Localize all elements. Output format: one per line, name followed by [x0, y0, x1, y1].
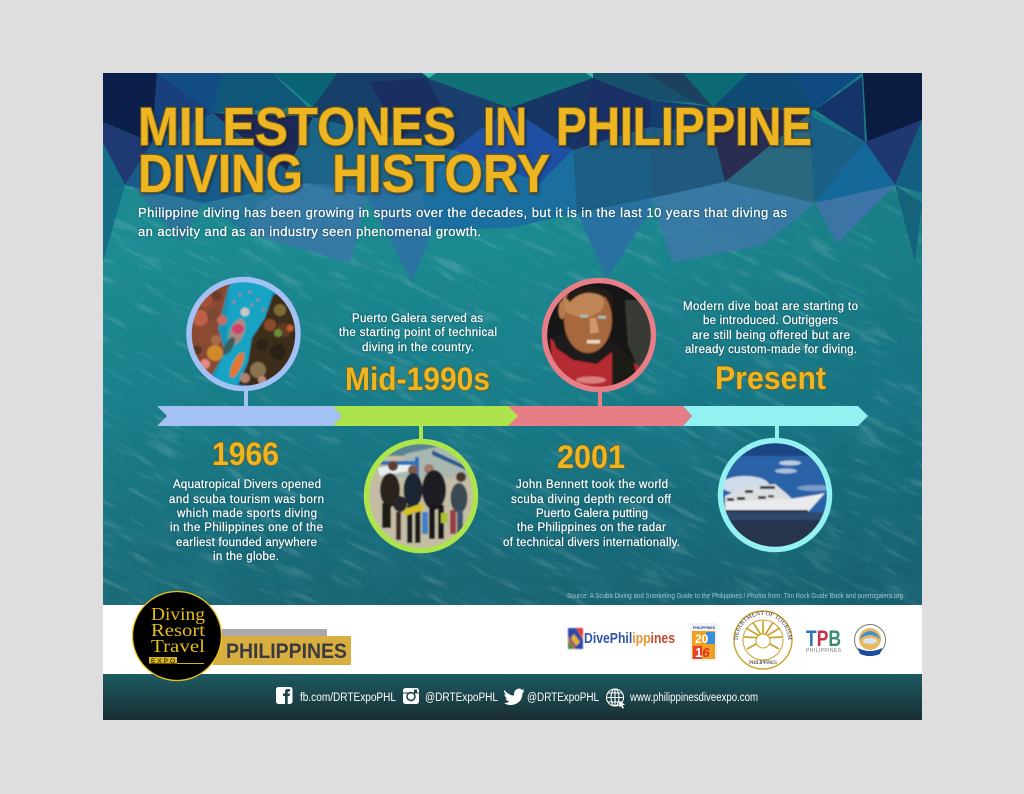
- logo: Philippines 2016: PHILIPPINES: [693, 626, 716, 630]
- panel: footer band: [103, 674, 922, 720]
- milestone 2001 text: of technical divers internationally.: [503, 537, 680, 549]
- instagram handle: @DRTExpoPHL: [425, 692, 499, 704]
- logo: Philippines 2016: 16: [695, 645, 710, 660]
- title: PHILIPPINE: [556, 97, 812, 157]
- logo: Diving Resort Travel Expo Philippines: [132, 592, 351, 680]
- milestone present text: be introduced. Outriggers: [703, 315, 838, 327]
- logo: Philippines 2016: [690, 623, 717, 661]
- intro text: Philippine diving has been growing in spurts over the decades, but it is in the last 10 years that diving as: [138, 205, 788, 220]
- logo: Diving Resort Travel Expo Philippines: PHILIPPINES: [226, 640, 347, 663]
- logo: DivePhilippines: [568, 628, 675, 649]
- logo: Diving Resort Travel Expo Philippines: EXPO: [151, 658, 175, 665]
- logo: Diving Resort Travel Expo Philippines: Resort: [151, 620, 205, 640]
- logo: Department of Tourism seal: DEPARTMENT OF TOURISM: [734, 611, 792, 640]
- milestone mid-1990s text: the starting point of technical: [339, 327, 497, 339]
- title: MILESTONES: [138, 97, 456, 157]
- milestone 1966 text: in the Philippines one of the: [170, 522, 323, 534]
- intro text: an activity and as an industry seen phenomenal growth.: [138, 224, 481, 239]
- facebook handle: fb.com/DRTExpoPHL: [300, 692, 397, 704]
- intro text: [138, 205, 788, 239]
- milestone present text: Present: [715, 360, 826, 396]
- milestone 1966 text: which made sports diving: [176, 508, 317, 520]
- icon: globe: [606, 689, 625, 708]
- title: IN: [483, 97, 527, 157]
- panel: white logo band: [103, 605, 922, 674]
- icon: twitter: [504, 688, 524, 705]
- title: [138, 97, 812, 204]
- icon: facebook: [276, 687, 292, 704]
- milestone 2001 photo: John Bennett: [544, 280, 660, 407]
- timeline arrow: [157, 406, 868, 426]
- logo: Diving Resort Travel Expo Philippines: Travel: [151, 636, 205, 656]
- milestone present photo: dive boat: [720, 425, 833, 554]
- milestone 1966 text: 1966: [212, 436, 279, 472]
- milestone present text: Modern dive boat are starting to: [683, 301, 858, 313]
- source note: Source: A Scuba Diving and Snorkeling Guide to the Philippines / Photos from: Tim Rock Guide Book and puertogalera.org: [567, 593, 903, 600]
- logo: Diving Resort Travel Expo Philippines: Diving: [151, 604, 205, 624]
- logo: Department of Tourism seal: PHILIPPINES: [749, 660, 777, 666]
- milestone mid-1990s photo: divers group: [365, 425, 477, 552]
- website: www.philippinesdiveexpo.com: [629, 692, 758, 704]
- logo: DivePhilippines: DivePhilippines: [584, 630, 675, 647]
- milestone 2001 text: [503, 439, 680, 549]
- logo: Department of Tourism seal: [733, 610, 793, 670]
- social links: [276, 687, 758, 708]
- milestone 1966 text: earliest founded anywhere: [176, 537, 317, 549]
- milestone present text: already custom-made for diving.: [685, 344, 857, 356]
- milestone 1966 text: in the globe.: [213, 551, 279, 563]
- logo: TPB Philippines: PHILIPPINES: [806, 648, 842, 654]
- panel: ocean background: [103, 73, 922, 605]
- milestone present text: are still being offered but are: [692, 330, 850, 342]
- milestone 1966 text: [169, 436, 324, 563]
- milestone 2001 text: scuba diving depth record off: [511, 494, 672, 506]
- title: DIVING: [138, 144, 303, 204]
- title: HISTORY: [332, 144, 550, 204]
- milestone 1966 photo: reef and diver: [189, 280, 300, 407]
- milestone 1966 text: Aquatropical Divers opened: [173, 479, 321, 491]
- milestone mid-1990s text: [339, 313, 497, 397]
- milestone 2001 text: Puerto Galera putting: [536, 508, 648, 520]
- twitter handle: @DRTExpoPHL: [527, 692, 600, 704]
- milestone 2001 text: 2001: [557, 439, 625, 475]
- milestone mid-1990s text: diving in the country.: [362, 342, 474, 354]
- logo: Philippines 2016: 20: [695, 632, 709, 646]
- icon: instagram: [403, 688, 419, 704]
- decorative polygon mesh: [103, 73, 922, 282]
- milestone 1966 text: and scuba tourism was born: [169, 494, 324, 506]
- milestone mid-1990s text: Mid-1990s: [345, 361, 490, 397]
- milestone 2001 text: John Bennett took the world: [516, 479, 668, 491]
- logo: TPB Philippines: TPB: [806, 626, 841, 651]
- milestone present text: [683, 301, 858, 396]
- milestone 2001 text: the Philippines on the radar: [517, 522, 666, 534]
- milestone mid-1990s text: Puerto Galera served as: [352, 313, 483, 325]
- logo: small association seal: [854, 624, 886, 656]
